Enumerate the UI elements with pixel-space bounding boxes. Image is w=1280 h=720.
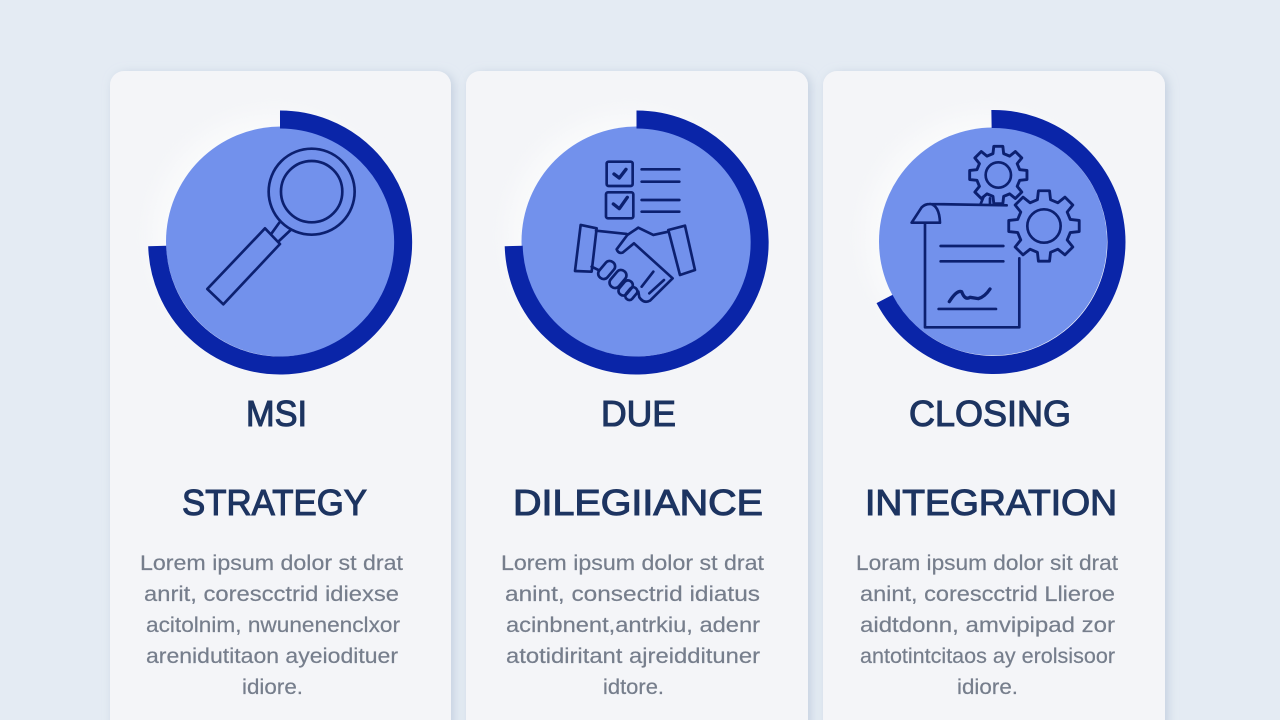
body text: strategy: arenidutitaon ayeiodituer (146, 645, 398, 668)
disc: integration (879, 128, 1107, 356)
icon: magnifying glass (207, 149, 355, 304)
body text: strategy: anrit, corescctrid idiexse (144, 583, 399, 606)
panel: M&A strategy (110, 71, 451, 720)
body text: strategy: acitolnim, nwunenenclxor (146, 614, 400, 637)
panel: closing integration (823, 71, 1165, 720)
progress ring: integration (884, 119, 1116, 365)
heading: STRATEGY: STRATEGY (182, 482, 367, 523)
progress ring: strategy (157, 119, 403, 365)
heading: DUE: DUE (601, 393, 676, 434)
body text: diligence: atotidiritant ajreiddituner (506, 645, 760, 668)
body text: diligence (501, 552, 764, 699)
disc: strategy (166, 126, 396, 356)
body text: diligence: acinbnent,antrkiu, adenr (506, 614, 760, 637)
disc: diligence (522, 126, 752, 356)
body text: diligence: anint, consectrid idiatus (505, 583, 760, 606)
body text: integration: anint, corescctrid Llieroe (860, 583, 1115, 606)
body text: strategy: idiore. (242, 676, 303, 699)
body text: integration (856, 552, 1118, 699)
icon: checklist and handshake (575, 162, 695, 302)
body text: diligence: idtore. (603, 676, 664, 699)
body text: strategy: Lorem ipsum dolor st drat (140, 552, 403, 575)
heading: DILEGIIANCE: DILEGIIANCE (513, 482, 763, 523)
heading: MSI: MSI (246, 393, 307, 434)
body text: integration: Loram ipsum dolor sit drat (856, 552, 1118, 575)
body text: integration: antotintcitaos ay erolsisoor (860, 645, 1115, 668)
panel: due diligence (466, 71, 808, 720)
body text: integration: aidtdonn, amvipipad zor (860, 614, 1115, 637)
body text: diligence: Lorem ipsum dolor st drat (501, 552, 764, 575)
body text: integration: idiore. (957, 676, 1018, 699)
heading: INTEGRATION: INTEGRATION (865, 482, 1117, 523)
heading: CLOSING: CLOSING (909, 393, 1071, 434)
progress ring: diligence (514, 119, 760, 365)
icon: document and gears (912, 146, 1079, 327)
body text: strategy (140, 552, 403, 699)
